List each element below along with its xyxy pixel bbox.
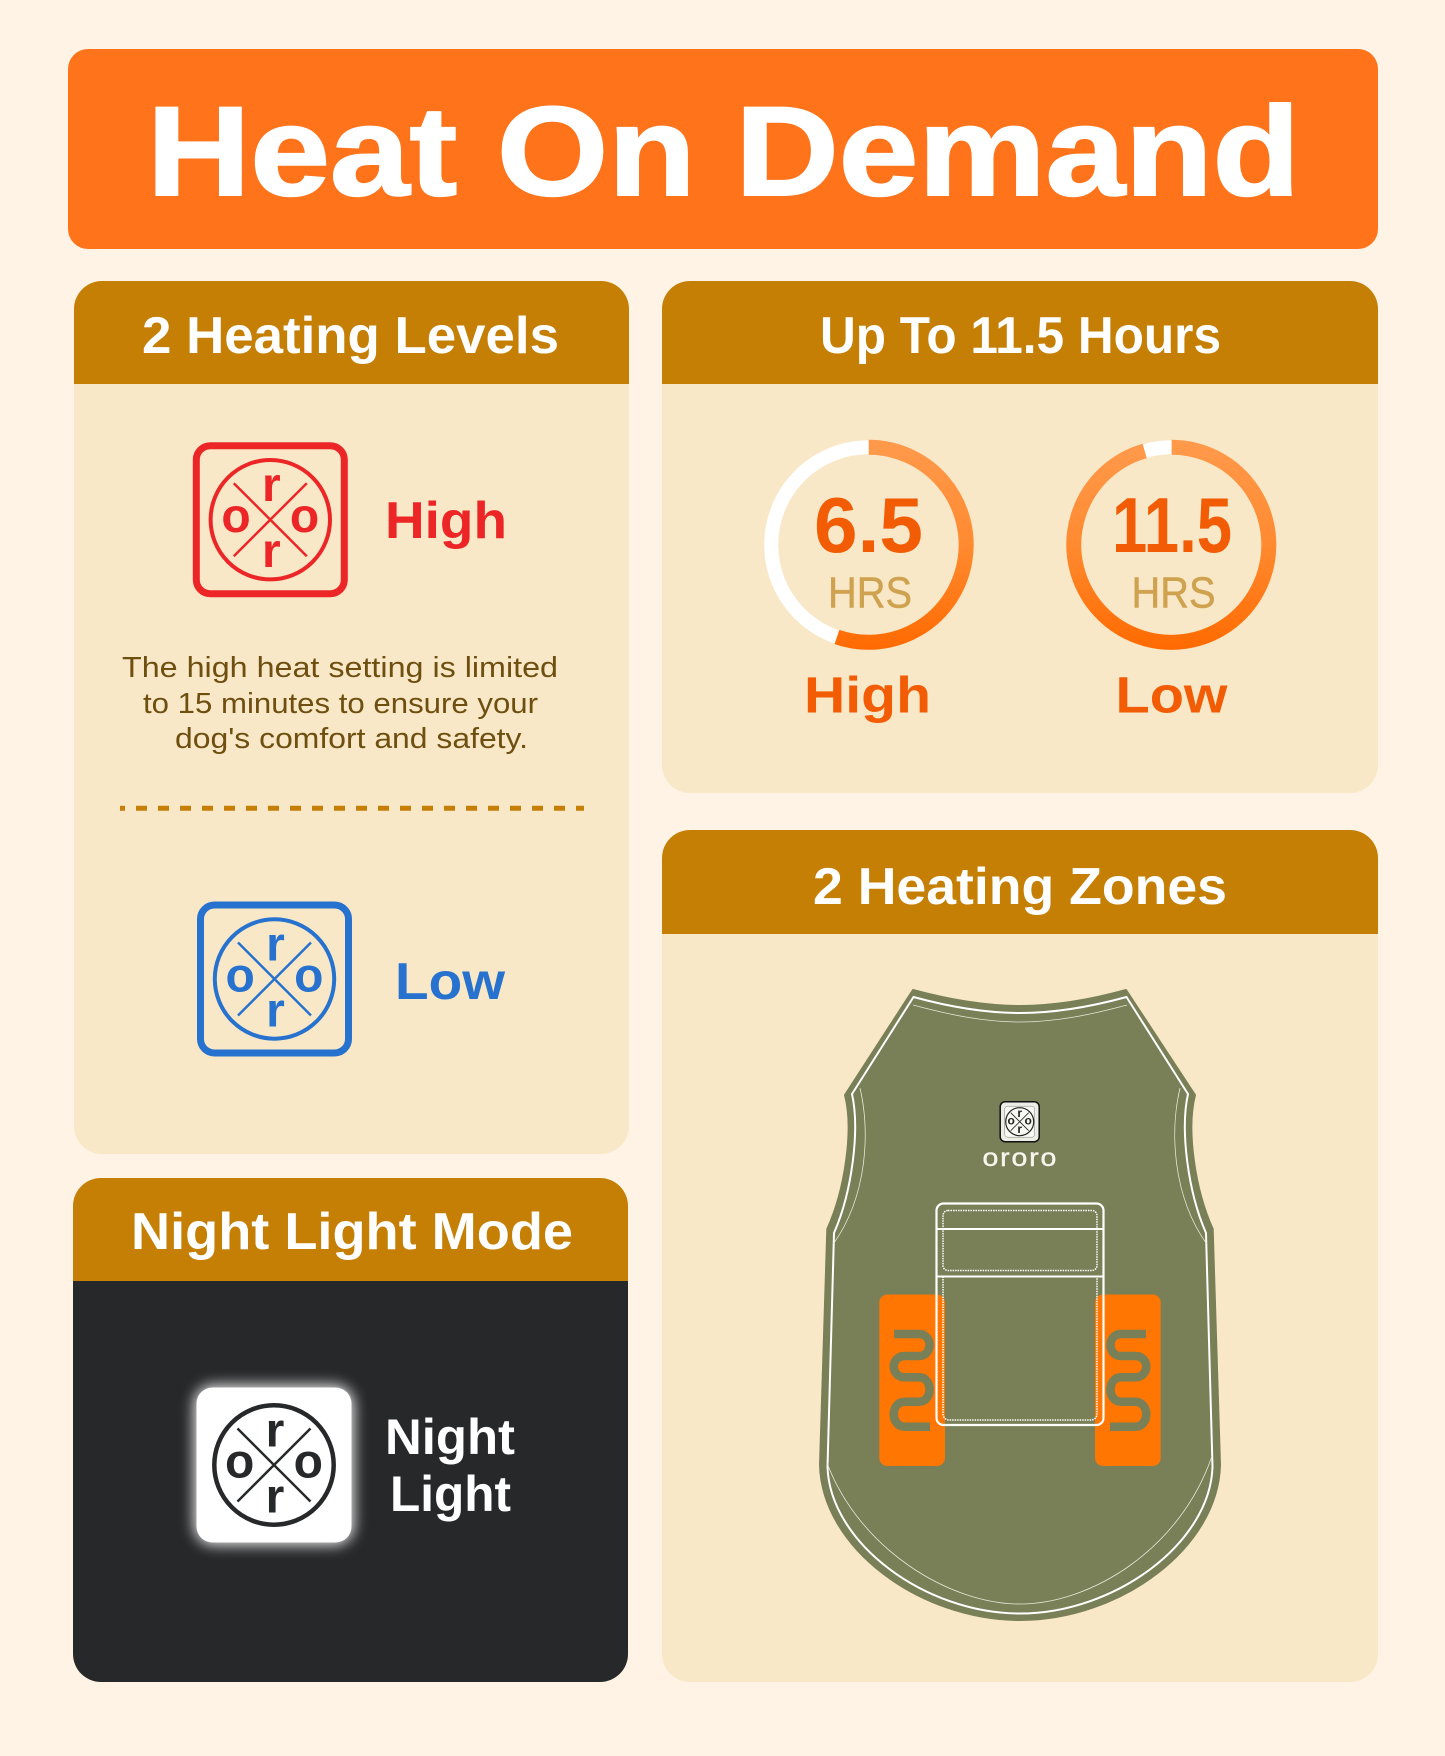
ring gauge: 11.5 hrs low [1074, 447, 1269, 724]
icon: high heat logo: o [290, 490, 319, 543]
panel header: 2 heating levels: 2 Heating Levels [142, 307, 559, 365]
icon: low heat logo: r [266, 918, 285, 972]
label: night light [385, 1409, 515, 1522]
icon: night light logo with glow: r [266, 1470, 284, 1524]
heating zone: right [1095, 1294, 1161, 1466]
label: high: High [385, 492, 507, 550]
panel header: up to 11.5 hours: Up To 11.5 Hours [820, 307, 1221, 365]
text block: high heat note: to 15 minutes to ensure your [143, 688, 538, 720]
illustration: dog vest [820, 990, 1220, 1620]
icon: low heat logo: o [226, 950, 255, 1002]
icon: night light logo with glow: o [294, 1436, 323, 1488]
panel header: 2 heating zones [662, 830, 1378, 934]
text block: high heat note: dog's comfort and safety. [175, 723, 528, 755]
icon: low heat logo: o [294, 950, 323, 1002]
panel: battery hours [662, 281, 1378, 793]
icon: high heat logo: r [262, 525, 281, 578]
ring gauge: 6.5 hrs high: 6.5 [814, 481, 923, 569]
ring gauge: 11.5 hrs low: HRS [1132, 568, 1216, 618]
icon: high heat logo: o [221, 490, 251, 543]
icon: night light logo with glow: r [266, 1404, 284, 1458]
icon: night light logo with glow [194, 1385, 354, 1545]
icon: low heat logo [200, 905, 348, 1053]
ring gauge: 11.5 hrs low: 11.5 [1112, 481, 1232, 569]
icon: high heat logo: r [262, 459, 281, 512]
panel header: night light mode [73, 1178, 628, 1281]
label: night light: Light [390, 1466, 511, 1522]
icon: high heat logo [196, 446, 344, 594]
title banner: Heat On Demand [147, 80, 1300, 222]
ring gauge: 11.5 hrs low: Low [1116, 666, 1228, 724]
vest logo badge: o [1008, 1114, 1015, 1128]
vest pocket [936, 1204, 1104, 1425]
vest logo badge: r [1017, 1122, 1022, 1136]
panel: 2 heating zones [662, 830, 1378, 1682]
vest logo badge: r [1017, 1106, 1022, 1120]
ring gauge: 6.5 hrs high [771, 447, 966, 724]
panel: 2 heating levels [74, 281, 629, 1154]
ring gauge: 6.5 hrs high: High [804, 666, 931, 724]
text block: high heat note [122, 652, 558, 755]
panel header: up to 11.5 hours [662, 281, 1378, 384]
icon: low heat logo: r [266, 984, 285, 1038]
panel: night light mode [73, 1178, 628, 1682]
text block: high heat note: The high heat setting is limited [122, 652, 558, 684]
label: low: Low [395, 953, 506, 1011]
icon: night light logo with glow: o [225, 1436, 254, 1488]
panel header: night light mode: Night Light Mode [131, 1203, 573, 1261]
title banner [68, 49, 1378, 249]
vest logo badge [1000, 1102, 1039, 1142]
vest logo badge: o [1025, 1114, 1032, 1128]
vest brand name: ororo [982, 1144, 1058, 1172]
panel header: 2 heating levels [74, 281, 629, 384]
label: night light: Night [385, 1409, 515, 1465]
heating zone: left [879, 1294, 945, 1466]
panel header: 2 heating zones: 2 Heating Zones [813, 858, 1227, 916]
ring gauge: 6.5 hrs high: HRS [828, 568, 912, 618]
